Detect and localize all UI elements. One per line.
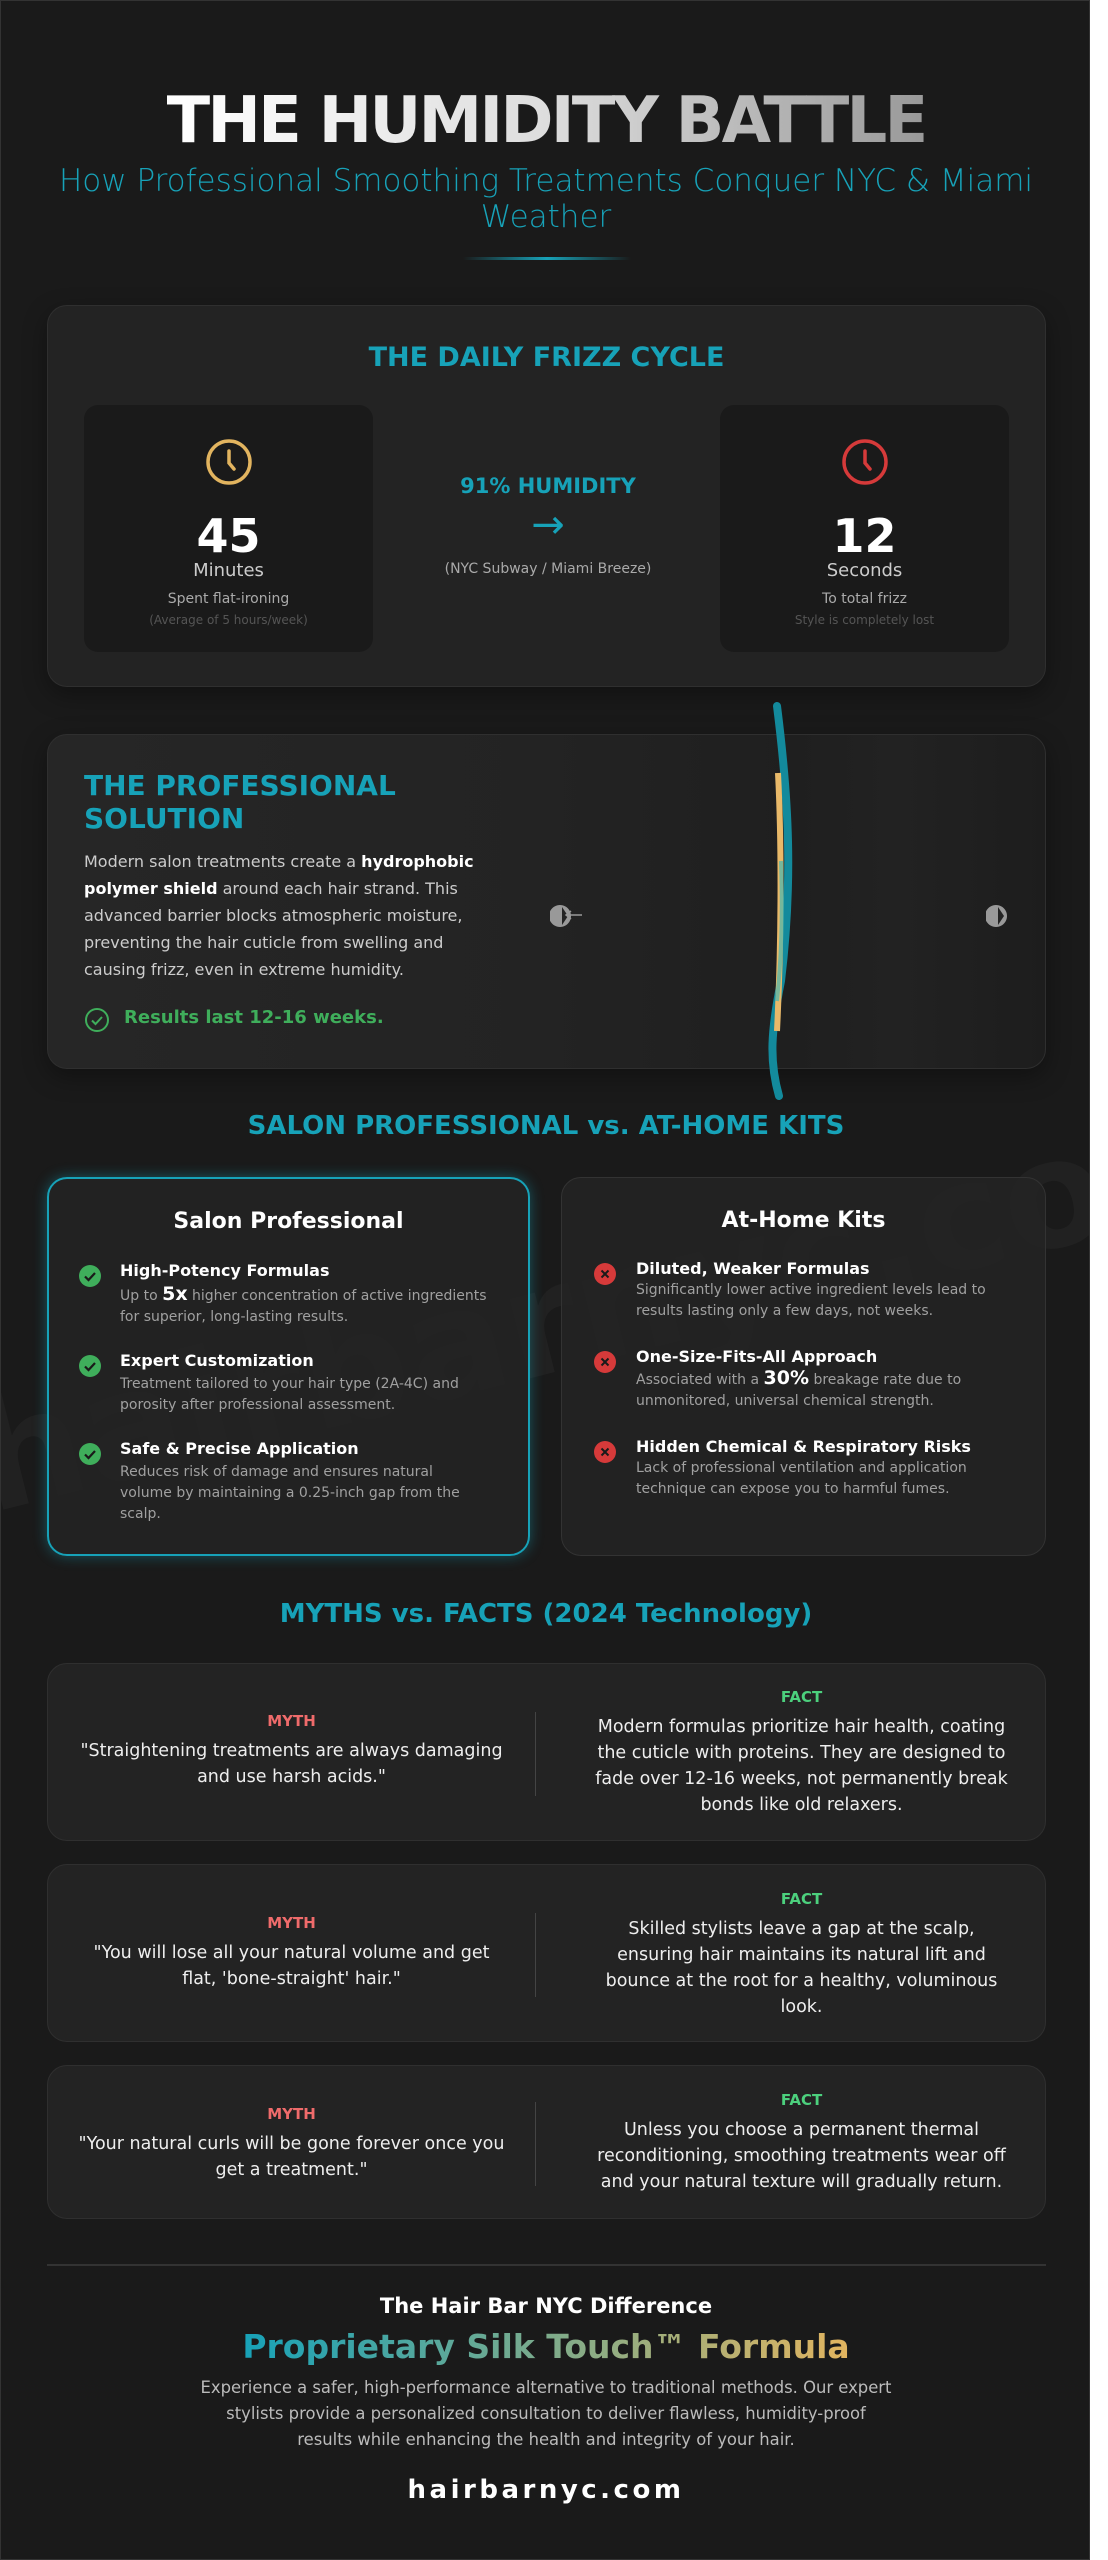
icon: gold clock xyxy=(206,439,252,485)
item: high potency: Up to 5x higher concentration of active ingredients for superior, long-lasting results. xyxy=(120,1283,486,1325)
card: 12 seconds: Seconds xyxy=(827,560,902,581)
item: chemical risks: Hidden Chemical & Respiratory Risks xyxy=(636,1437,971,1456)
fact text 3: FACT xyxy=(781,2091,822,2109)
myth text 2: "You will lose all your natural volume and get flat, 'bone-straight' hair." xyxy=(94,1943,489,1989)
panel: at-home kits xyxy=(561,1177,1046,1556)
footer paragraph: Experience a safer, high-performance alternative to traditional methods. Our expert stylists provide a personalized consultation to deliver flawless, humidity-proof results while enhancing the health and integrity of your hair. xyxy=(201,2378,891,2449)
item: diluted: Diluted, Weaker Formulas xyxy=(636,1259,870,1278)
footer: difference xyxy=(201,2294,892,2505)
myth text 1: MYTH xyxy=(267,1712,316,1730)
myth text 1: "Straightening treatments are always damaging and use harsh acids." xyxy=(80,1741,503,1787)
heading: daily frizz: THE DAILY FRIZZ CYCLE xyxy=(369,342,724,373)
card: 45 minutes xyxy=(84,405,373,652)
fact text 3: Unless you choose a permanent thermal reconditioning, smoothing treatments wear off and your natural texture will gradually return. xyxy=(597,2120,1006,2192)
myth text 3: "Your natural curls will be gone forever once you get a treatment." xyxy=(79,2134,504,2180)
heading: salon vs at-home: SALON PROFESSIONAL vs. AT-HOME KITS xyxy=(248,1111,844,1141)
item: safe application: Safe & Precise Application xyxy=(120,1439,359,1458)
item: safe application xyxy=(79,1439,460,1522)
card: 45 minutes: Spent flat-ironing xyxy=(168,591,289,607)
item: diluted: Significantly lower active ingredient levels lead to results lasting only a few days, not weeks. xyxy=(636,1282,986,1319)
myth text 3: MYTH xyxy=(267,2105,316,2123)
card: 12 seconds: 12 xyxy=(832,509,896,563)
heading: at-home kits: At-Home Kits xyxy=(722,1208,885,1233)
fact text 1: Modern formulas prioritize hair health, coating the cuticle with proteins. They are designed to fade over 12-16 weeks, not permanently break bonds like old relaxers. xyxy=(595,1717,1008,1815)
item: one-size: Associated with a 30% breakage rate due to unmonitored, universal chemical strength. xyxy=(636,1367,961,1409)
panel: myth 2 xyxy=(47,1864,1046,2042)
myth text 1 xyxy=(80,1712,503,1787)
illustration: hair strand xyxy=(768,702,792,1100)
formula name: Proprietary Silk Touch™ Formula xyxy=(242,2327,850,2366)
icon: red clock xyxy=(842,439,888,485)
heading: professional solution xyxy=(84,769,396,835)
icon: water repel left xyxy=(550,905,582,927)
website: hairbarnyc.com xyxy=(408,2475,684,2505)
fact text 2: Skilled stylists leave a gap at the scalp, ensuring hair maintains its natural lift and bounce at the root for a healthy, voluminous look. xyxy=(606,1919,997,2017)
panel: myth 1 xyxy=(47,1663,1046,1841)
item: expert customization xyxy=(79,1351,459,1413)
card: 12 seconds xyxy=(720,405,1009,652)
fact text 1: FACT xyxy=(781,1688,822,1706)
panel: salon professional xyxy=(47,1177,530,1556)
card: 12 seconds: Style is completely lost xyxy=(795,613,934,627)
item: one-size xyxy=(594,1347,961,1409)
card: 45 minutes: (Average of 5 hours/week) xyxy=(149,613,308,627)
item: high potency: High-Potency Formulas xyxy=(120,1261,329,1280)
item: one-size: One-Size-Fits-All Approach xyxy=(636,1347,877,1366)
item: high potency xyxy=(79,1261,486,1325)
icon: water repel right xyxy=(986,905,1007,927)
icon: check circle xyxy=(85,1008,109,1032)
myth text 2: MYTH xyxy=(267,1914,316,1932)
title: THE HUMIDITY BATTLE xyxy=(167,84,925,158)
item: expert customization: Treatment tailored to your hair type (2A-4C) and porosity after professional assessment. xyxy=(120,1376,459,1413)
text: solution paragraph: Modern salon treatments create a hydrophobic polymer shield around each hair strand. This advanced barrier blocks atmospheric moisture, preventing the hair cuticle from swelling and causing frizz, even in extreme humidity. xyxy=(84,852,474,979)
fact text 2: FACT xyxy=(781,1890,822,1908)
item: chemical risks xyxy=(594,1437,971,1497)
myth text 3 xyxy=(79,2105,504,2180)
item: diluted xyxy=(594,1259,986,1319)
heading: salon professional: Salon Professional xyxy=(173,1209,404,1234)
middle: humidity arrow: → xyxy=(531,502,565,548)
item: safe application: Reduces risk of damage and ensures natural volume by maintaining a 0.25-inch gap from the scalp. xyxy=(120,1464,460,1522)
panel: daily frizz cycle xyxy=(47,305,1046,687)
middle: humidity arrow xyxy=(445,474,651,577)
myth text 2 xyxy=(94,1914,490,1989)
card: 45 minutes: 45 xyxy=(196,509,260,563)
card: 12 seconds: To total frizz xyxy=(822,591,907,607)
panel: professional solution xyxy=(47,734,1046,1069)
subtitle: How Professional Smoothing Treatments Conquer NYC & Miami Weather xyxy=(59,163,1033,235)
item: chemical risks: Lack of professional ventilation and application technique can expose you to harmful fumes. xyxy=(636,1460,967,1497)
item: expert customization: Expert Customization xyxy=(120,1351,314,1370)
card: 45 minutes: Minutes xyxy=(193,560,264,581)
middle: humidity arrow: (NYC Subway / Miami Breeze) xyxy=(445,561,651,577)
footer heading: The Hair Bar NYC Difference xyxy=(380,2294,712,2318)
results badge: Results last 12-16 weeks. xyxy=(124,1007,384,1028)
panel: myth 3 xyxy=(47,2065,1046,2219)
heading: professional solution: SOLUTION xyxy=(84,802,244,835)
middle: humidity arrow: 91% HUMIDITY xyxy=(460,474,636,498)
heading: myths vs facts: MYTHS vs. FACTS (2024 Technology) xyxy=(280,1599,812,1629)
heading: professional solution: THE PROFESSIONAL xyxy=(84,769,396,802)
